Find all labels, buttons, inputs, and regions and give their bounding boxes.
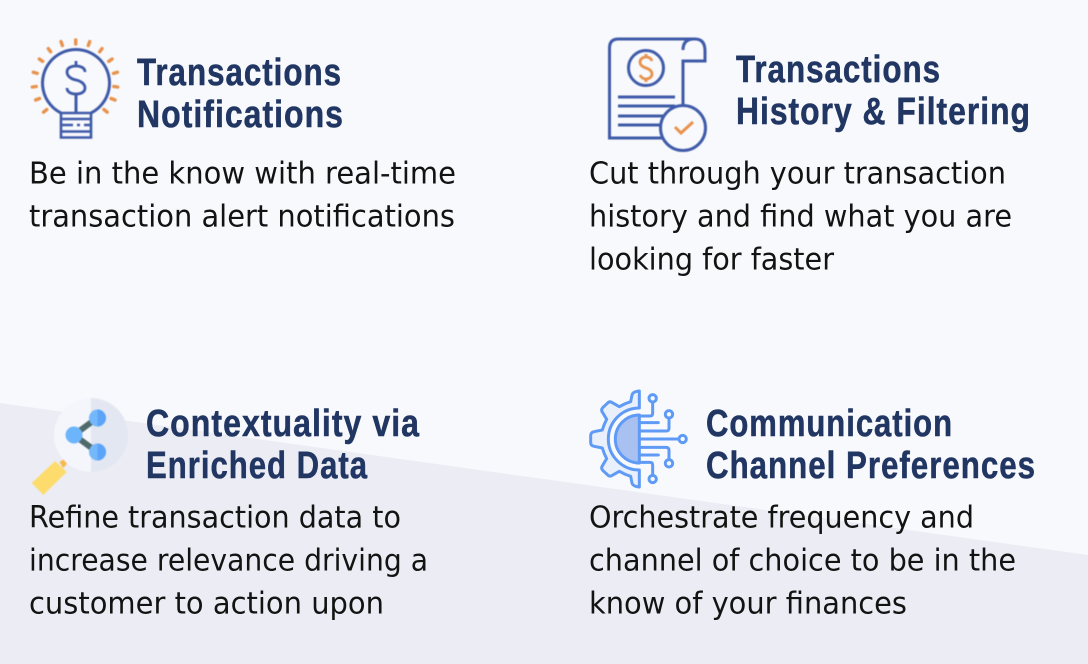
- text: communication description: know of your finances: [589, 586, 907, 622]
- text: communication description: [589, 500, 1016, 622]
- icon: magnifier with share nodes: [32, 398, 128, 495]
- heading: Transactions History and Filtering: History & Filtering: [736, 91, 1031, 133]
- icon: document with check: [610, 39, 706, 150]
- text: notifications description: transaction alert notifications: [29, 200, 455, 234]
- heading: Contextuality via Enriched Data: Contextuality via: [146, 403, 420, 445]
- text: contextuality description: customer to action upon: [29, 586, 384, 622]
- heading: Communication Channel Preferences: [706, 403, 1036, 487]
- heading: Transactions History and Filtering: Transactions: [736, 49, 941, 91]
- text: notifications description: Be in the know with real-time: [29, 156, 456, 192]
- text: contextuality description: increase relevance driving a: [29, 544, 428, 578]
- heading: Contextuality via Enriched Data: [146, 403, 420, 487]
- heading: Communication Channel Preferences: Communication: [706, 403, 953, 445]
- text: history description: [589, 156, 1012, 278]
- heading: Transactions Notifications: [137, 52, 344, 136]
- text: contextuality description: [29, 500, 428, 622]
- text: communication description: channel of choice to be in the: [589, 544, 1016, 578]
- icon: light bulb with dollar: [32, 40, 118, 138]
- text: communication description: Orchestrate frequency and: [589, 500, 974, 536]
- text: history description: history and find what you are: [589, 200, 1012, 234]
- text: contextuality description: Refine transaction data to: [29, 500, 401, 536]
- heading: Transactions History and Filtering: [736, 49, 1031, 133]
- icon: half gear with circuit lines: [591, 391, 686, 487]
- text: history description: Cut through your transaction: [589, 156, 1006, 192]
- heading: Transactions Notifications: Transactions: [137, 52, 342, 94]
- heading: Transactions Notifications: Notifications: [137, 94, 344, 136]
- heading: Contextuality via Enriched Data: Enriched Data: [146, 445, 368, 487]
- text: notifications description: [29, 156, 456, 234]
- text: history description: looking for faster: [589, 242, 835, 278]
